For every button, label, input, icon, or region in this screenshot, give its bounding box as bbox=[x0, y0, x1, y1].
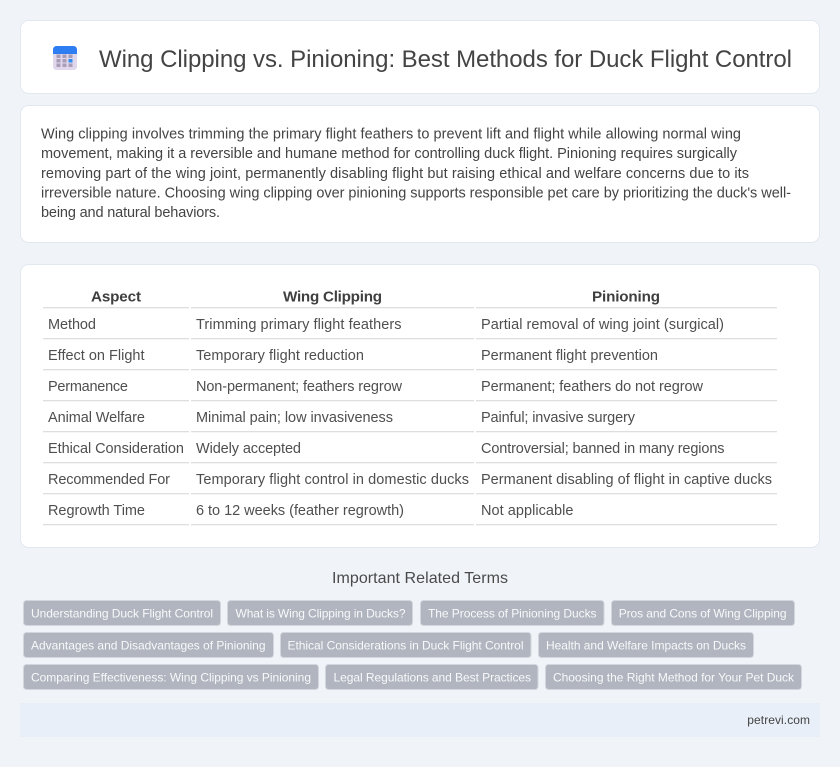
intro text block: removing part of the wing joint, permanently disabling flight but raising ethical and welfare concerns due to its bbox=[41, 166, 749, 182]
tag: pros and cons bbox=[612, 600, 794, 626]
tag: understanding duck flight control bbox=[24, 600, 220, 626]
intro text block bbox=[41, 126, 791, 221]
footer site name: petrevi.com bbox=[747, 713, 810, 727]
table header row bbox=[43, 288, 777, 308]
row: effect on flight bbox=[43, 348, 777, 370]
tag: choosing the right method: Choosing the Right Method for Your Pet Duck bbox=[553, 670, 795, 684]
panel: header bbox=[20, 20, 820, 94]
tag: comparing effectiveness bbox=[24, 664, 318, 690]
tag: choosing the right method bbox=[546, 664, 802, 690]
tag: pros and cons: Pros and Cons of Wing Clipping bbox=[619, 606, 786, 620]
intro text block: irreversible nature. Choosing wing clipping over pinioning supports responsible pet care by prioritizing the duck's well- bbox=[41, 186, 791, 202]
tag: legal regulations: Legal Regulations and Best Practices bbox=[334, 670, 531, 684]
row: permanence bbox=[43, 379, 777, 401]
tag: advantages and disadvantages bbox=[24, 632, 274, 658]
tag: process of pinioning: The Process of Pinioning Ducks bbox=[428, 606, 596, 620]
row: regrowth time: Regrowth Time bbox=[48, 503, 145, 519]
tag: what is wing clipping: What is Wing Clipping in Ducks? bbox=[236, 606, 406, 620]
row: permanence: Non-permanent; feathers regrow bbox=[196, 379, 403, 395]
row: method: Partial removal of wing joint (surgical) bbox=[481, 317, 724, 333]
row: animal welfare: Animal Welfare bbox=[48, 410, 145, 426]
table header row: Pinioning bbox=[592, 288, 660, 306]
tag: legal regulations bbox=[326, 664, 538, 690]
row: method bbox=[43, 317, 777, 339]
row: ethical consideration: Controversial; banned in many regions bbox=[481, 441, 724, 457]
tag: health and welfare: Health and Welfare Impacts on Ducks bbox=[546, 638, 746, 652]
row: permanence: Permanence bbox=[48, 379, 128, 395]
tag: ethical considerations: Ethical Considerations in Duck Flight Control bbox=[288, 638, 524, 652]
tag: ethical considerations bbox=[280, 632, 531, 658]
tag: health and welfare bbox=[538, 632, 754, 658]
related terms heading: Important Related Terms bbox=[332, 570, 508, 587]
row: effect on flight: Temporary flight reduction bbox=[196, 348, 364, 364]
title: Wing Clipping vs. Pinioning: Best Methods for Duck Flight Control bbox=[99, 46, 792, 73]
row: ethical consideration bbox=[43, 441, 777, 463]
table header row: Wing Clipping bbox=[283, 288, 382, 306]
row: regrowth time bbox=[43, 503, 777, 525]
row: recommended for: Recommended For bbox=[48, 472, 170, 488]
row: regrowth time: 6 to 12 weeks (feather regrowth) bbox=[196, 503, 404, 519]
row: method: Method bbox=[48, 317, 96, 333]
footer bbox=[20, 703, 820, 737]
row: ethical consideration: Ethical Consideration bbox=[48, 441, 184, 457]
row: method: Trimming primary flight feathers bbox=[196, 317, 402, 333]
intro text block: Wing clipping involves trimming the primary flight feathers to prevent lift and flight while allowing normal wing bbox=[41, 126, 741, 142]
intro text block: movement, making it a reversible and humane method for controlling duck flight. Pinioning requires surgically bbox=[41, 146, 738, 162]
tag: what is wing clipping bbox=[228, 600, 412, 626]
row: recommended for bbox=[43, 472, 777, 494]
panel: introduction bbox=[20, 106, 820, 242]
row: effect on flight: Permanent flight prevention bbox=[481, 348, 658, 364]
tag: comparing effectiveness: Comparing Effectiveness: Wing Clipping vs Pinioning bbox=[31, 670, 311, 684]
row: regrowth time: Not applicable bbox=[481, 503, 574, 519]
row: recommended for: Permanent disabling of flight in captive ducks bbox=[481, 472, 772, 488]
row: ethical consideration: Widely accepted bbox=[196, 441, 301, 457]
tag: process of pinioning bbox=[420, 600, 604, 626]
section: related terms bbox=[24, 570, 802, 690]
table header row: Aspect bbox=[91, 288, 141, 306]
icon: calendar bbox=[53, 46, 77, 70]
row: animal welfare bbox=[43, 410, 777, 432]
panel: comparison table bbox=[20, 264, 820, 548]
row: recommended for: Temporary flight control in domestic ducks bbox=[196, 472, 469, 488]
tag: advantages and disadvantages: Advantages and Disadvantages of Pinioning bbox=[31, 638, 266, 652]
row: effect on flight: Effect on Flight bbox=[48, 348, 144, 364]
intro text block: being and natural behaviors. bbox=[41, 205, 220, 221]
row: permanence: Permanent; feathers do not regrow bbox=[481, 379, 704, 395]
row: animal welfare: Minimal pain; low invasiveness bbox=[196, 410, 393, 426]
row: animal welfare: Painful; invasive surgery bbox=[481, 410, 636, 426]
tag: understanding duck flight control: Understanding Duck Flight Control bbox=[31, 606, 213, 620]
